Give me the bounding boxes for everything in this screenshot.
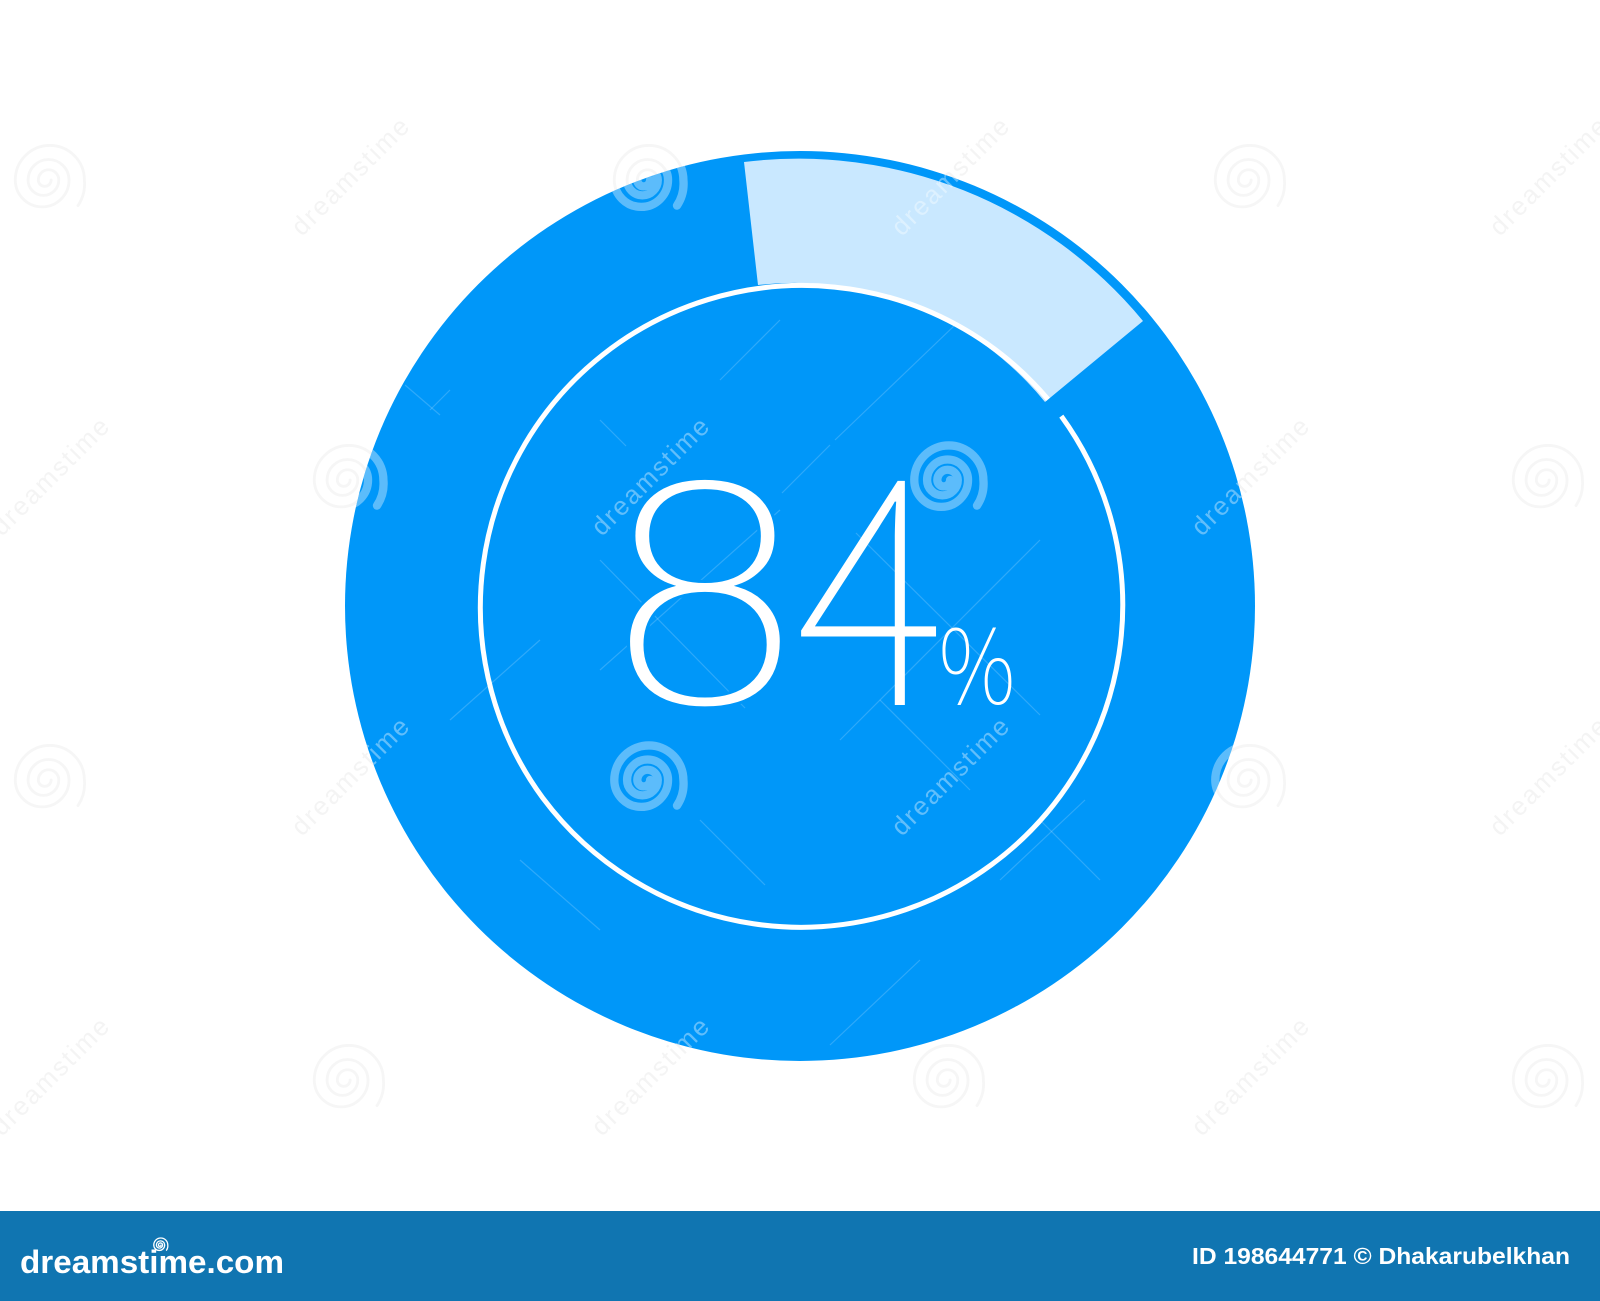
watermark layer on white background: dreamstime [285, 710, 416, 841]
inner white ring [480, 285, 1123, 927]
watermark layer on blue disc: dreamstime [585, 410, 716, 541]
watermark layer on blue disc: dreamstime [885, 110, 1016, 241]
watermark layer on blue disc: dreamstime [585, 1010, 716, 1141]
digit 8: 8 [596, 423, 814, 776]
digit 4: 4 [796, 337, 946, 797]
light segment: remaining 16 percent [744, 159, 1143, 402]
footer credit: image id and author: ID 198644771 © Dhakarubelkhan [1192, 1243, 1570, 1269]
value label: 84% [596, 337, 1015, 797]
watermark layer on white background: dreamstime [1185, 410, 1316, 541]
watermark layer on blue disc: dreamstime [285, 710, 416, 841]
donut chart [345, 151, 1255, 1061]
watermark layer on blue disc [356, 166, 1242, 1048]
watermark layer on white background: dreamstime [285, 110, 416, 241]
watermark layer on blue disc: dreamstime [885, 710, 1016, 841]
footer bar [0, 1211, 1600, 1301]
footer logo: dreamstime.com: dreamstime.com [20, 1244, 284, 1280]
watermark layer on blue disc: dreamstime [1185, 410, 1316, 541]
watermark layer on white background: dreamstime [885, 110, 1016, 241]
blue disc: 84 percent [345, 151, 1255, 1061]
watermark layer on white background: dreamstime [585, 1010, 716, 1141]
percent sign: % [939, 584, 1015, 734]
watermark layer on white background [0, 110, 1600, 1141]
watermark layer on white background: dreamstime [1185, 1010, 1316, 1141]
